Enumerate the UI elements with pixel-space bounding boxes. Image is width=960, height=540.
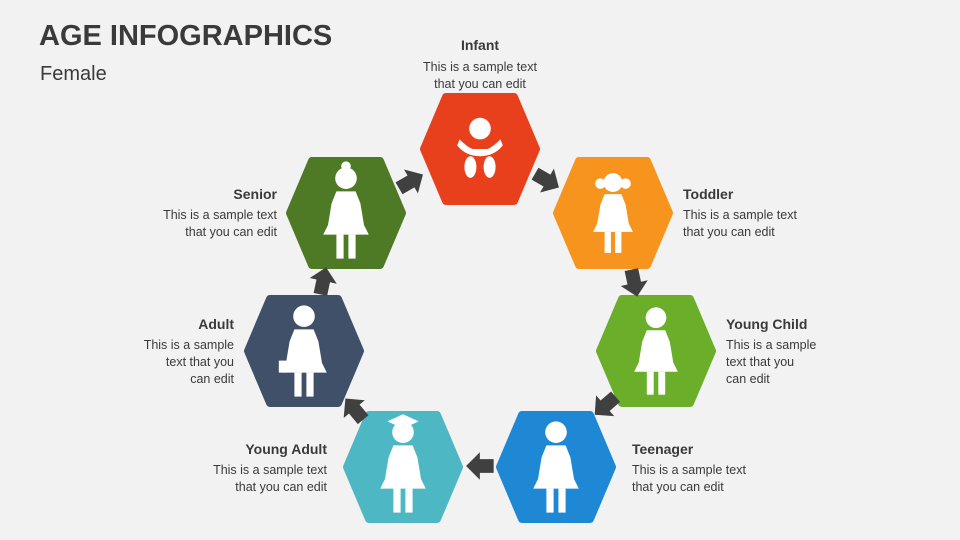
hex: teenager <box>500 415 612 519</box>
label: senior: Senior <box>233 186 278 202</box>
label: young adult: that you can edit <box>235 480 328 494</box>
label: toddler: This is a sample text <box>683 208 797 222</box>
hex: young child <box>600 299 712 403</box>
label: toddler: Toddler <box>683 186 734 202</box>
label: teenager: This is a sample text <box>632 463 746 477</box>
label: young child: This is a sample <box>726 338 816 352</box>
label: teenager: Teenager <box>632 441 694 457</box>
label: teenager: that you can edit <box>632 480 724 494</box>
label: adult: text that you <box>166 355 234 369</box>
label: young adult: Young Adult <box>245 441 327 457</box>
hex: young adult <box>347 414 459 519</box>
label: infant: This is a sample text <box>423 60 537 74</box>
label: young child: can edit <box>726 372 770 386</box>
label: young child <box>726 316 816 386</box>
arrows <box>307 162 651 480</box>
label: adult: can edit <box>190 372 235 386</box>
label: infant <box>423 37 537 91</box>
label: young adult <box>213 441 328 494</box>
label: toddler <box>683 186 797 239</box>
hex: senior <box>290 161 402 265</box>
label: infant: that you can edit <box>434 77 526 91</box>
label: toddler: that you can edit <box>683 225 775 239</box>
subtitle: Female <box>40 63 107 85</box>
hex: adult <box>248 299 360 403</box>
label: adult: Adult <box>198 316 234 332</box>
label: senior <box>163 186 278 239</box>
label: young adult: This is a sample text <box>213 463 328 477</box>
label: adult: This is a sample <box>144 338 234 352</box>
hex: toddler <box>557 161 669 265</box>
label: infant: Infant <box>461 37 499 53</box>
label: senior: that you can edit <box>185 225 278 239</box>
label: young child: Young Child <box>726 316 807 332</box>
label: young child: text that you <box>726 355 794 369</box>
title: AGE INFOGRAPHICS <box>39 20 332 52</box>
label: teenager <box>632 441 746 494</box>
hex: infant <box>424 97 536 201</box>
label: adult <box>144 316 235 386</box>
label: senior: This is a sample text <box>163 208 278 222</box>
